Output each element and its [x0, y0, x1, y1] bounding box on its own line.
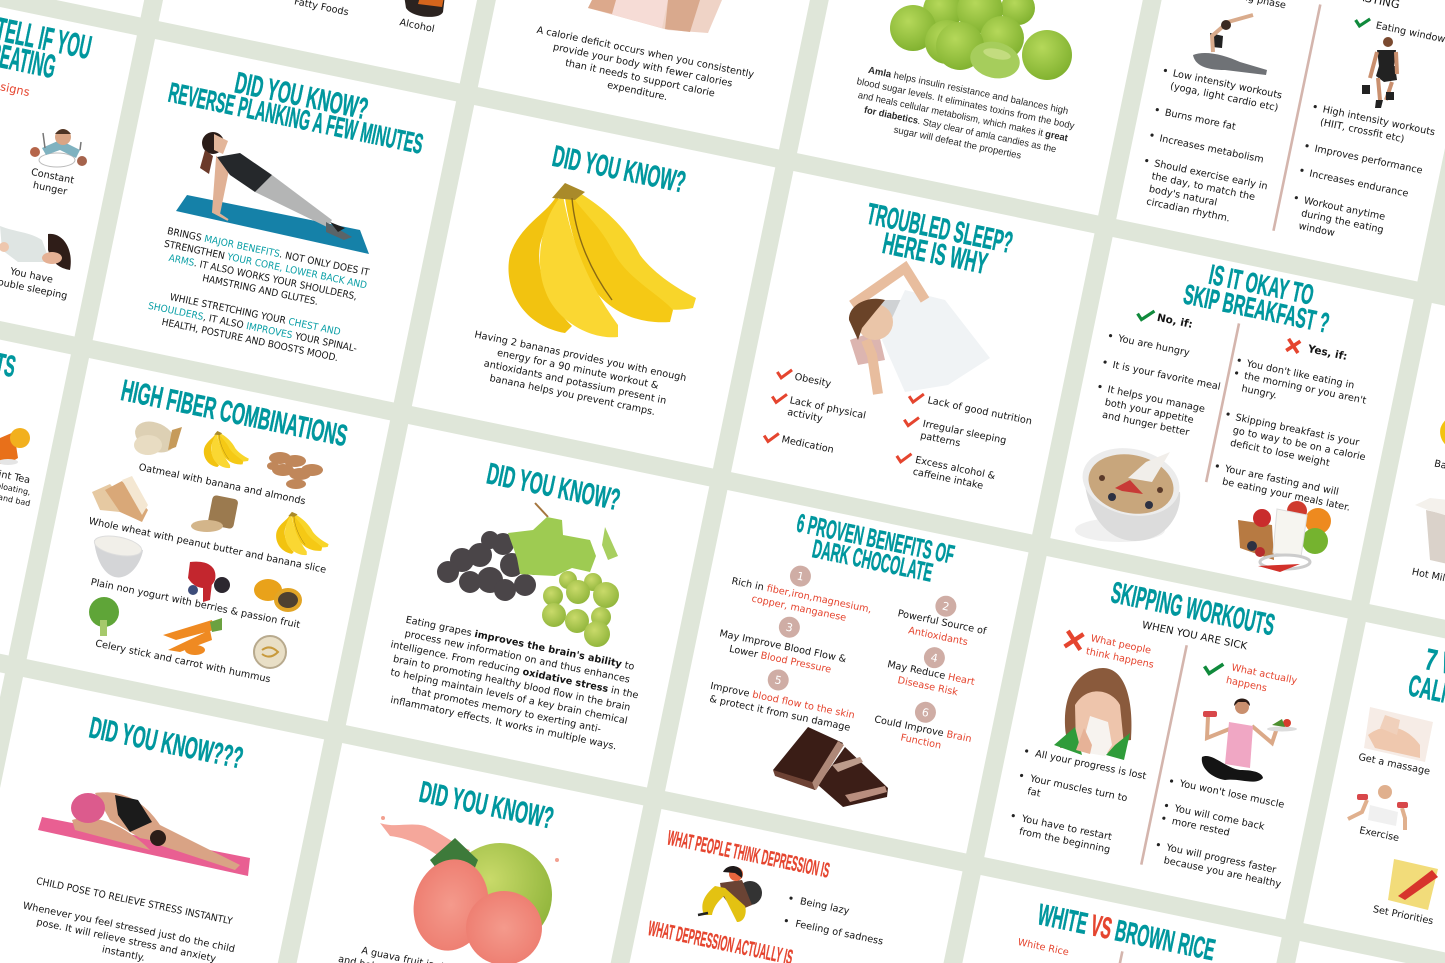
text block: to helping maintain levels of a key brain chemical — [389, 667, 628, 727]
number badges: 1 — [796, 570, 805, 584]
checklist: Excess alcohol & — [914, 455, 997, 482]
text block: calorie deficit: A calorie deficit occurs when you consistently — [536, 25, 755, 81]
text block: amla: Amla helps insulin resistance and balances high — [867, 65, 1069, 117]
illustration: sitting person — [698, 866, 762, 922]
benefit 2: Powerful Source of — [897, 608, 987, 637]
label: yes if: Yes, if: — [1306, 343, 1348, 363]
list: high intensity: Workout anytime — [1303, 195, 1386, 223]
list: left — [1008, 746, 1147, 860]
icon: bread — [92, 476, 148, 522]
icon: oats — [130, 415, 182, 459]
icon: banana — [204, 431, 249, 468]
card: grapes — [346, 424, 709, 787]
card: banana — [412, 105, 775, 468]
heading — [1405, 641, 1445, 736]
card: high fiber — [27, 358, 390, 721]
checklist — [762, 364, 1033, 499]
caption: trouble sleeping: You have — [9, 266, 54, 286]
label: what people think: think happens — [1085, 646, 1155, 671]
icon: tea and orange — [0, 428, 30, 465]
list: yes: go to way to be on a calorie — [1232, 425, 1367, 463]
checklist: patterns — [919, 430, 961, 449]
checklist: Lack of physical — [789, 395, 867, 422]
caption: celery: Celery stick and carrot with hummus — [94, 638, 271, 685]
card: depression — [599, 809, 963, 963]
card: troubled sleep — [731, 171, 1095, 534]
photo: exercise woman — [1348, 785, 1408, 830]
benefit 5: Improve blood flow to the skin — [709, 681, 856, 721]
list: low intensity: body's natural — [1148, 184, 1218, 209]
checklist: Irregular sleeping — [922, 419, 1007, 447]
text block: amla: blood sugar levels. It eliminates toxins from the body — [856, 76, 1075, 132]
text block: antioxidants and potassium present in — [483, 358, 667, 407]
list: yes: be eating your meals later. — [1221, 476, 1351, 514]
list: yes: hungry. — [1240, 383, 1278, 401]
card text: high fiber — [27, 358, 390, 721]
heading: DID YOU KNOW??? — [86, 711, 246, 775]
benefit 3: Lower Blood Pressure — [728, 644, 832, 676]
card: white vs brown rice — [918, 875, 1282, 963]
benefit 6: Function — [900, 732, 942, 752]
text block: that promotes memory to exerting anti- — [410, 685, 602, 735]
heading: HIGH FIBER COMBINATIONS — [118, 374, 350, 453]
number badges: 6 — [921, 706, 930, 720]
checklist: Medication — [781, 434, 835, 456]
list: low intensity: Burns more fat — [1164, 107, 1237, 133]
card text: reverse planking — [93, 39, 456, 402]
card: amla — [797, 0, 1161, 215]
heading: HERE IS WHY — [880, 227, 990, 281]
text block: inflammatory effects. It works in multiple ways. — [389, 695, 617, 752]
card text: remedies — [0, 292, 71, 655]
photo: cereal bowl — [1075, 440, 1186, 542]
heading: DID YOU KNOW? — [484, 457, 623, 517]
card text: seven ways — [1303, 622, 1445, 963]
photo: child pose — [38, 792, 250, 876]
checklist: activity — [786, 407, 824, 425]
card: left edge — [0, 611, 5, 963]
icon: yogurt — [93, 533, 143, 577]
list: yes: the morning or you aren't — [1243, 371, 1367, 407]
icon: milk glass — [1415, 498, 1445, 564]
number badges — [765, 564, 960, 725]
list: high intensity: Improves performance — [1313, 143, 1423, 177]
label: what actually happens: happens — [1225, 675, 1268, 694]
icon: almonds — [267, 452, 323, 489]
caption: priorities: Set Priorities — [1372, 904, 1434, 927]
card text: calorie deficit — [478, 0, 841, 149]
text block: intelligence. From reducing oxidative stress in the — [389, 639, 639, 701]
photo: woman — [588, 0, 722, 33]
text block: benefits: ARMS. IT ALSO WORKS YOUR SHOULDERS, — [168, 253, 358, 303]
heading — [1181, 254, 1337, 339]
caption: massage: Get a massage — [1357, 752, 1431, 777]
list: right: because you are healthy — [1163, 855, 1282, 890]
list: myths: Being lazy — [799, 896, 850, 917]
caption: constant hunger: hunger — [32, 180, 68, 198]
text block: benefits: STRENGTHEN YOUR CORE, LOWER BACK AND — [163, 239, 368, 291]
text block: banana helps you prevent cramps. — [489, 373, 656, 418]
list: yes: Your are fasting and will — [1223, 464, 1340, 498]
photo: chocolate — [773, 727, 888, 807]
checklist: Lack of good nutrition — [927, 395, 1033, 427]
text block: amla: and heals cellular metabolism, which makes it great — [857, 90, 1069, 144]
list: myths: Feeling of sadness — [794, 919, 884, 948]
cross icon — [1065, 631, 1084, 650]
number badges: 3 — [785, 621, 794, 635]
icon: sleeping woman — [0, 226, 71, 270]
card text: depression — [599, 809, 963, 963]
card text: overeating signs — [0, 0, 137, 336]
text block: amla: sugar will defeat the properties — [893, 125, 1022, 162]
text block: stretching: SHOULDERS, IT ALSO IMPROVES YOUR SPINAL- — [147, 301, 358, 355]
card: foods to avoid — [159, 0, 522, 83]
number badges: 4 — [930, 651, 939, 665]
caption: yogurt: Plain non yogurt with berries & passion fruit — [90, 577, 301, 631]
card: skipping workouts — [984, 556, 1348, 919]
photo: reverse plank on mat — [176, 132, 369, 254]
heading: reverse planking: REVERSE PLANKING A FEW MINUTES — [166, 77, 426, 160]
list: right: You will progress faster — [1164, 842, 1277, 876]
list: low intensity: Low intensity workouts — [1172, 68, 1283, 102]
benefit 6: Could Improve Brain — [873, 714, 972, 745]
text block: process new information on and thus enhances — [404, 628, 631, 686]
checklist: caffeine intake — [912, 467, 984, 492]
list: high intensity: window — [1297, 221, 1336, 239]
photo: guava — [380, 816, 559, 963]
heading: DID YOU KNOW? — [550, 140, 689, 200]
card: banana and milk — [1369, 303, 1445, 666]
card text: depression: WHAT PEOPLE THINK DEPRESSION IS — [665, 827, 832, 883]
card text: foods — [159, 0, 522, 83]
list: high intensity: during the eating — [1300, 208, 1385, 236]
card text: dark chocolate — [665, 490, 1029, 853]
check icon — [1137, 308, 1154, 322]
card: corner top left — [0, 0, 203, 17]
card: bottom right corner — [1237, 941, 1445, 963]
text block: calorie deficit: provide your body with fewer calories — [552, 42, 733, 90]
card text: guava — [280, 743, 643, 963]
heading: 6 PROVEN BENEFITS OF — [794, 508, 957, 569]
heading — [859, 198, 1016, 285]
divider — [1103, 951, 1124, 963]
list: myths — [783, 894, 889, 948]
card: reverse planking — [93, 39, 456, 402]
photo: massage — [1364, 707, 1433, 762]
cross icon — [1286, 339, 1300, 353]
list: low intensity: the day, to match the — [1151, 171, 1256, 203]
card text: skipping workouts — [984, 556, 1348, 919]
photo: grapes — [437, 503, 619, 647]
icon: celery — [89, 597, 119, 636]
card text: grapes — [346, 424, 709, 787]
list: low intensity: (yoga, light cardio etc) — [1169, 81, 1279, 114]
list: no: both your appetite — [1104, 397, 1195, 426]
list: no: It helps you manage — [1106, 384, 1206, 415]
subheading: WHEN YOU ARE SICK — [1141, 620, 1248, 652]
heading: SKIP BREAKFAST ? — [1181, 278, 1332, 339]
heading: SKIPPING WORKOUTS — [1108, 576, 1277, 642]
caption: constant hunger: Constant — [30, 167, 75, 186]
card: remedies partial — [0, 292, 71, 655]
card text: fasting workouts — [1116, 0, 1445, 281]
text block: stretching: HEALTH, POSTURE AND BOOSTS MOOD. — [161, 317, 339, 364]
icon: carrots — [163, 618, 222, 655]
text block: benefits: BRINGS MAJOR BENEFITS. NOT ONLY DOES IT — [166, 226, 370, 279]
list: high intensity: Increases endurance — [1308, 168, 1409, 200]
icon: hummus — [254, 636, 286, 668]
figure: fit woman — [1362, 37, 1397, 108]
icon: banana slice — [276, 512, 329, 555]
figure: yoga pose — [1193, 15, 1267, 75]
photo: man in bed — [849, 268, 990, 394]
list: left: fat — [1026, 786, 1042, 800]
list: low intensity: Increases metabolism — [1158, 133, 1265, 166]
photo: sneezing woman — [1054, 668, 1132, 760]
photo: banana bunch — [508, 183, 696, 337]
benefit 2: Antioxidants — [907, 625, 969, 648]
list: yes: You don't like eating in — [1246, 358, 1355, 391]
list: left: Your muscles turn to — [1028, 773, 1128, 804]
text block: stretching — [144, 288, 361, 368]
card: guava — [280, 743, 643, 963]
number badges: 5 — [773, 673, 783, 688]
text block: brain to promoting healthy blood flow in the brain — [392, 654, 631, 714]
text block: calorie deficit: expenditure. — [606, 80, 668, 103]
caption: alcohol: Alcohol — [399, 17, 435, 35]
card: fasting workouts — [1116, 0, 1445, 281]
divider — [1272, 4, 1322, 231]
card: skip breakfast — [1050, 237, 1414, 600]
card: child pose — [0, 677, 324, 963]
list: left: All your progress is lost — [1034, 749, 1147, 782]
benefit 5: & protect it from sun damage — [708, 694, 851, 734]
card text: amla — [797, 0, 1161, 215]
divider — [1140, 645, 1188, 865]
list: yes: Skipping breakfast is your — [1234, 412, 1360, 449]
list: high intensity: (HIIT, crossfit etc) — [1319, 117, 1405, 145]
list: no: You are hungry — [1117, 333, 1191, 359]
icon: passion fruit — [254, 579, 302, 612]
icon: berries — [188, 562, 230, 602]
list: right: You won't lose muscle — [1179, 778, 1285, 811]
label: no if: No, if: — [1156, 312, 1194, 331]
list: no: and hunger better — [1101, 410, 1190, 438]
card text: child pose — [0, 677, 324, 963]
photo: milk and fruit — [1238, 501, 1331, 572]
card: overeating signs — [0, 0, 137, 336]
list: left: from the beginning — [1018, 826, 1111, 856]
benefit 1: Rich in fiber,iron,magnesium, — [730, 576, 873, 616]
heading: did you know: DID YOU KNOW? — [232, 67, 371, 126]
list: right: You will come back — [1172, 803, 1266, 833]
text block: Whenever you feel stressed just do the child — [22, 901, 236, 955]
card text: troubled sleep — [731, 171, 1095, 534]
heading: DARK CHOCOLATE — [810, 533, 935, 587]
label: white rice: White Rice — [1017, 937, 1070, 958]
list: no: It is your favorite meal — [1111, 360, 1221, 393]
caption: whole wheat: Whole wheat with peanut butter and banana slice — [88, 516, 327, 576]
check icon — [1203, 660, 1223, 676]
divider — [1205, 323, 1240, 482]
card text: banana — [412, 105, 775, 468]
list: right: more rested — [1171, 816, 1231, 839]
list: no — [1092, 331, 1227, 443]
checklist: Obesity — [794, 372, 832, 390]
caption: oatmeal: Oatmeal with banana and almonds — [138, 462, 306, 507]
text block: Eating grapes improves the brain's ability to — [405, 615, 635, 673]
icon: peanut butter — [191, 495, 239, 532]
card text: skip breakfast — [1050, 237, 1414, 600]
list: high intensity: High intensity workouts — [1322, 104, 1436, 138]
card: dark chocolate — [665, 490, 1029, 853]
text block: amla: for diabetics. Stay clear of amla candies as the — [863, 105, 1057, 155]
label: eating window: Eating window — [1375, 20, 1445, 45]
benefit 3: May Improve Blood Flow & — [718, 628, 847, 665]
icon: banana — [1440, 408, 1445, 451]
text block: amla — [848, 63, 1078, 171]
number badges: 2 — [941, 600, 951, 614]
heading: IS IT OKAY TO — [1206, 259, 1316, 311]
check icon — [1355, 16, 1370, 28]
text block: energy for a 90 minute workout & — [496, 348, 660, 392]
heading: overeating — [0, 0, 95, 91]
label: what actually happens: What actually — [1230, 662, 1298, 687]
card: seven ways — [1303, 622, 1445, 963]
text block: benefits — [158, 226, 371, 317]
list: low intensity — [1136, 66, 1287, 231]
text block: calorie deficit: than it needs to support calorie — [564, 58, 716, 99]
list: yes: deficit to lose weight — [1229, 438, 1331, 469]
text block: benefits: HAMSTRING AND GLUTES. — [201, 273, 319, 308]
caption: exercise: Exercise — [1358, 825, 1400, 844]
heading: TROUBLED SLEEP? — [864, 198, 1016, 260]
list: left: You have to restart — [1020, 813, 1113, 843]
text block: stretching: WHILE STRETCHING YOUR CHEST AND — [169, 292, 341, 338]
card: calorie deficit — [478, 0, 841, 149]
list: yes — [1212, 356, 1380, 515]
photo: amla fruits — [890, 0, 1072, 83]
benefit 1: copper, manganese — [751, 594, 847, 624]
benefit 4: Disease Risk — [897, 675, 959, 698]
heading — [790, 508, 957, 591]
card text: rice — [918, 875, 1282, 963]
label: what people think: What people — [1090, 633, 1152, 657]
text block: Having 2 bananas provides you with enough — [473, 329, 687, 384]
heading: DID YOU KNOW? — [417, 776, 556, 836]
icon: alcohol glass — [404, 0, 445, 17]
photo: fit woman — [1202, 698, 1297, 782]
list: high intensity — [1288, 102, 1436, 255]
icon: note and pencil — [1388, 859, 1438, 910]
icon: hungry man — [30, 129, 87, 167]
card text: sleep foods — [1369, 303, 1445, 666]
list: right — [1153, 776, 1298, 890]
list: low intensity: Should exercise early in — [1153, 158, 1269, 192]
list: low intensity: circadian rhythm. — [1145, 196, 1231, 225]
subheading: CHILD POSE TO RELIEVE STRESS INSTANTLY — [35, 876, 233, 927]
benefit 4: May Reduce Heart — [886, 659, 976, 688]
